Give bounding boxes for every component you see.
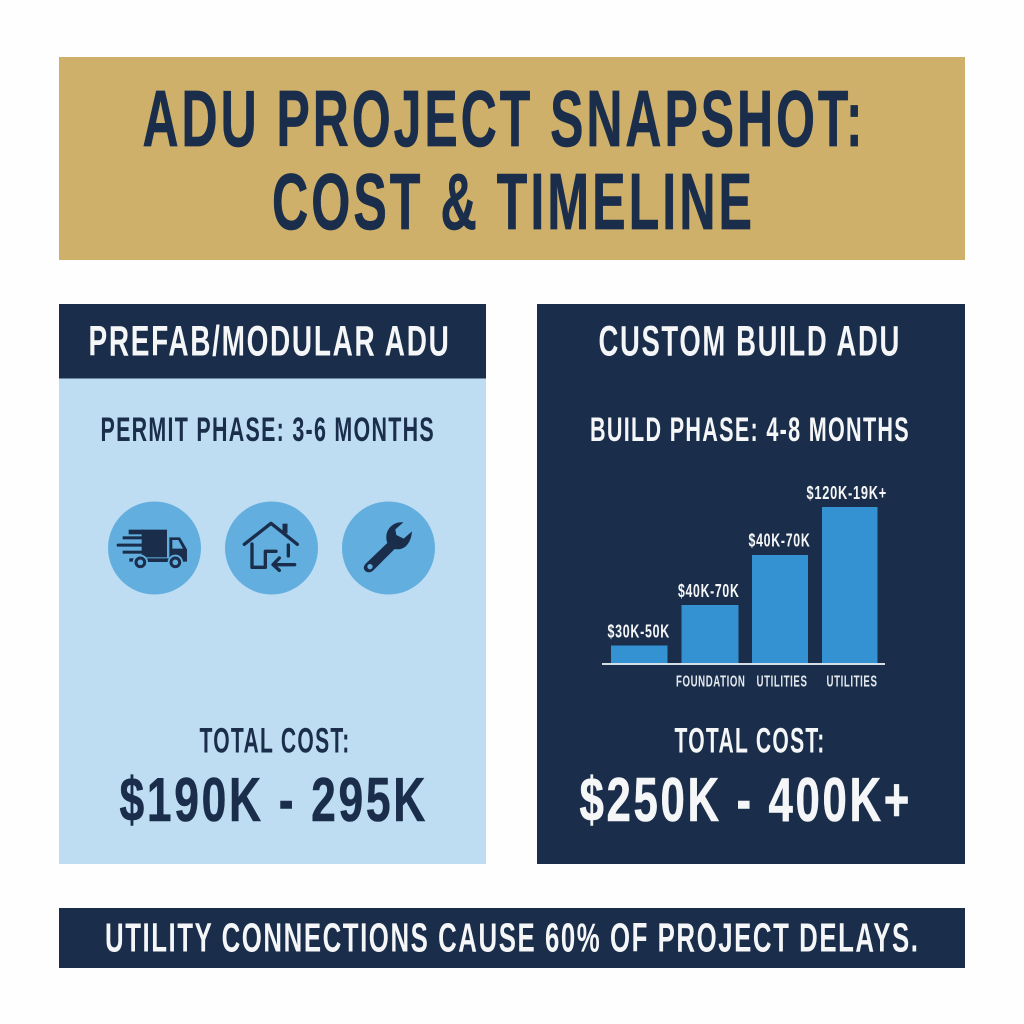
total cost label: prefab: TOTAL COST: bbox=[200, 722, 350, 760]
bar value labels: $120K-19K+ bbox=[806, 483, 887, 503]
footer callout bbox=[59, 908, 965, 968]
panel: prefab/modular ADU bbox=[59, 304, 486, 864]
bar value labels: $40K-70K bbox=[748, 530, 810, 550]
total cost value: prefab: $190K - 295K bbox=[120, 766, 428, 835]
bar category labels: UTILITIES bbox=[756, 674, 808, 690]
panel: custom build ADU bbox=[537, 304, 965, 864]
icon: delivery truck bbox=[108, 502, 201, 594]
panel header: prefab bbox=[59, 304, 486, 378]
permit phase text: PERMIT PHASE: 3-6 MONTHS bbox=[100, 411, 435, 449]
title banner bbox=[59, 57, 965, 260]
bar value labels: $30K-50K bbox=[608, 622, 670, 642]
title: COST & TIMELINE bbox=[272, 157, 755, 246]
bar value labels: $40K-70K bbox=[678, 581, 740, 601]
total cost label: custom: TOTAL COST: bbox=[674, 722, 826, 760]
bar category labels: FOUNDATION bbox=[676, 674, 746, 690]
icon: wrench bbox=[342, 502, 435, 594]
bar category labels bbox=[676, 674, 878, 690]
bar value labels bbox=[608, 483, 887, 642]
title bbox=[142, 74, 866, 246]
bar category labels: UTILITIES bbox=[826, 674, 878, 690]
panel header: prefab: PREFAB/MODULAR ADU bbox=[88, 318, 450, 366]
bar chart bbox=[602, 483, 887, 690]
icon: house with arrow bbox=[225, 502, 318, 594]
